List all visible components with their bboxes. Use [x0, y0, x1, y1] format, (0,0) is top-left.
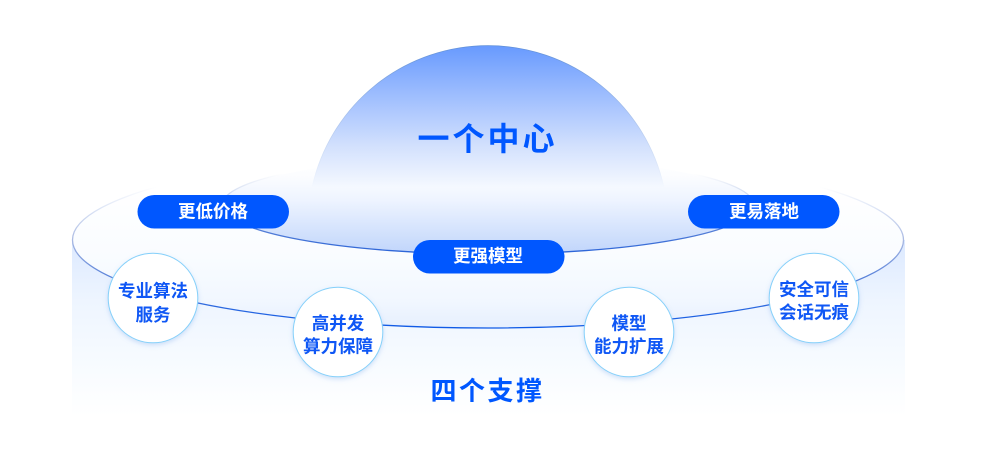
pill: lower price: 更低价格	[178, 202, 248, 222]
circle: high concurrency compute: 算力保障	[303, 336, 373, 356]
pill: easier deployment: 更易落地	[729, 202, 799, 222]
pill: stronger model	[413, 240, 564, 274]
large disc	[72, 152, 904, 328]
circle: secure session	[769, 253, 859, 343]
circle: professional algorithm service: 专业算法	[118, 281, 188, 301]
circle: model capability expansion: 能力扩展	[594, 336, 664, 356]
pill: easier deployment	[688, 195, 840, 228]
base cylinder	[72, 240, 905, 416]
dome	[312, 46, 664, 187]
circle: high concurrency compute	[293, 287, 383, 377]
heading: four supports: 四个支撑	[430, 376, 545, 406]
circle: secure session: 会话无痕	[779, 302, 849, 322]
circle: model capability expansion	[584, 287, 674, 377]
small disc	[222, 156, 754, 254]
circle: model capability expansion: 模型	[612, 314, 646, 334]
pill: lower price	[138, 195, 289, 228]
circle: secure session: 安全可信	[779, 280, 849, 300]
circle: high concurrency compute: 高并发	[312, 314, 365, 334]
circle: professional algorithm service	[108, 253, 198, 343]
title: one center: 一个中心	[417, 121, 558, 157]
circle: professional algorithm service: 服务	[136, 305, 170, 325]
pill: stronger model: 更强模型	[453, 246, 523, 266]
